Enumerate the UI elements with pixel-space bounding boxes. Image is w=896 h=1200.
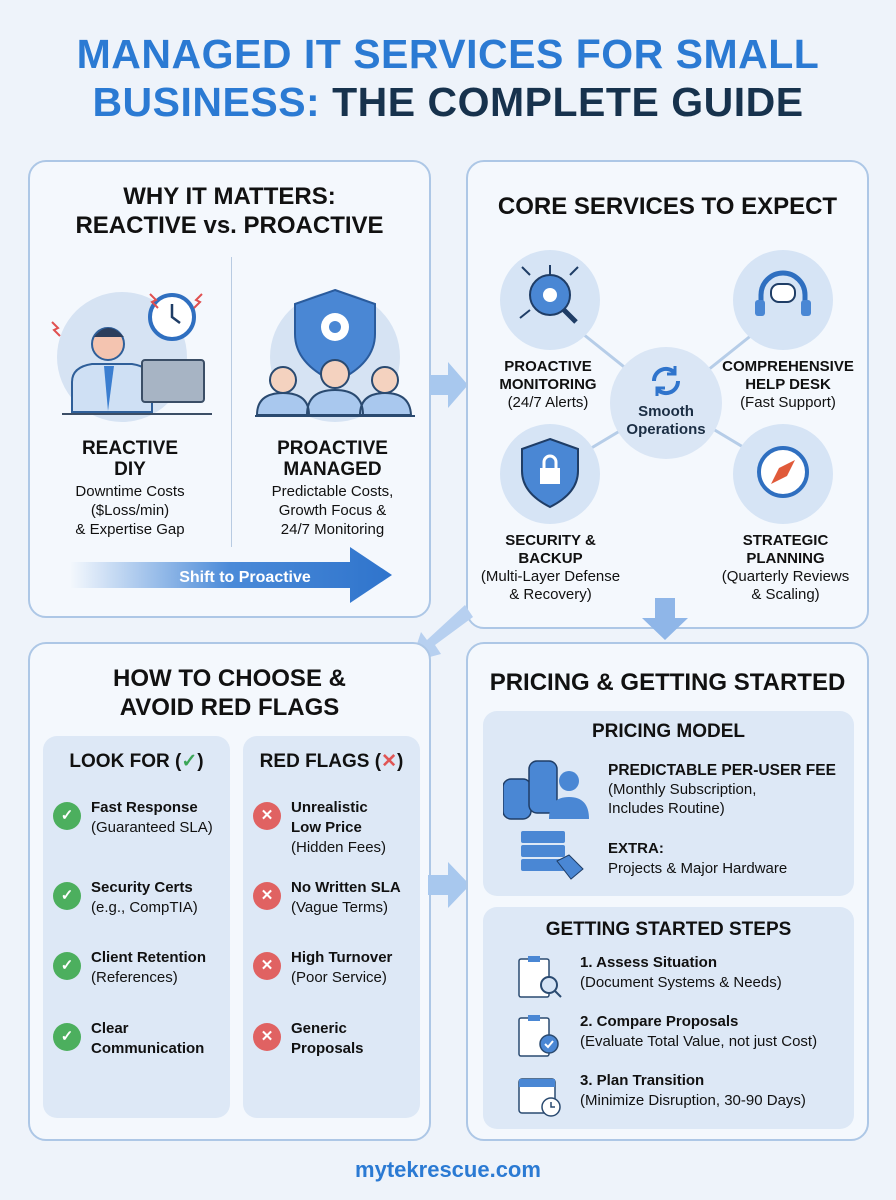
item: no written SLA: No Written SLA (291, 879, 401, 896)
text: per-user fee: (Monthly Subscription, (608, 781, 756, 798)
connector lines (584, 334, 750, 449)
heading: why it matters: REACTIVE vs. PROACTIVE (75, 212, 384, 239)
illustration: stressed reactive worker (51, 292, 212, 422)
item: generic proposals: ✕ (261, 1028, 273, 1045)
heading: how to choose: HOW TO CHOOSE & (113, 665, 346, 692)
text: reactive DIY: REACTIVE (82, 438, 178, 459)
footer: mytekrescue.com (355, 1157, 541, 1182)
item: high turnover: ✕ (261, 957, 273, 974)
text: proactive monitoring (499, 358, 597, 411)
icon: security (500, 424, 600, 524)
text: per-user fee: Includes Routine) (608, 800, 725, 817)
item: unrealistic price: Low Price (291, 819, 362, 836)
text: help desk: HELP DESK (745, 376, 831, 393)
icon: help desk (733, 250, 833, 350)
heading: how to choose: AVOID RED FLAGS (120, 694, 339, 721)
arrow: right connector (431, 362, 466, 408)
item: no written SLA: ✕ (261, 887, 273, 904)
arrow: shift to proactive: Shift to Proactive (179, 569, 311, 586)
title (77, 31, 819, 125)
text: reactive DIY (75, 438, 185, 538)
text: help desk: COMPREHENSIVE (722, 358, 854, 375)
column: red flags: RED FLAGS (✕) (260, 751, 403, 772)
item: fast response: Fast Response (91, 799, 198, 816)
text: reactive DIY: & Expertise Gap (75, 521, 185, 538)
item: security certs: Security Certs (91, 879, 193, 896)
box: getting started (483, 907, 854, 1129)
text: per-user fee (608, 762, 836, 817)
step 1: (Document Systems & Needs) (580, 974, 782, 991)
panel: how to choose (28, 642, 431, 1141)
text: proactive managed (272, 438, 393, 538)
item: fast response: (Guaranteed SLA) (91, 819, 213, 836)
heading: why it matters: WHY IT MATTERS: (123, 183, 336, 210)
divider (231, 257, 232, 547)
icon: smooth operations: Operations (626, 421, 706, 438)
item: client retention (53, 949, 206, 986)
step 3: (Minimize Disruption, 30-90 Days) (580, 1092, 806, 1109)
column: red flags (243, 736, 420, 1118)
icon: smooth operations: Smooth (638, 403, 694, 420)
text: reactive DIY: DIY (114, 459, 146, 480)
text: proactive monitoring: (24/7 Alerts) (508, 394, 588, 411)
text: security backup: & Recovery) (509, 586, 592, 603)
text: security backup: (Multi-Layer Defense (481, 568, 620, 585)
text: proactive managed: Predictable Costs, (272, 483, 393, 500)
text: reactive DIY: Downtime Costs (75, 483, 185, 500)
icon: coins and user (503, 760, 589, 820)
title: BUSINESS: THE COMPLETE GUIDE (92, 79, 804, 125)
heading: how to choose (113, 665, 346, 721)
arrow: to pricing (428, 862, 466, 908)
item: unrealistic price: Unrealistic (291, 799, 368, 816)
text: extra: Projects & Major Hardware (608, 860, 787, 877)
item: no written SLA (253, 879, 401, 916)
text: strategic planning: & Scaling) (751, 586, 820, 603)
step 3 (518, 1072, 806, 1117)
item: unrealistic price: ✕ (261, 807, 273, 824)
arrow: down connector (642, 598, 688, 640)
text: proactive monitoring: PROACTIVE (504, 358, 592, 375)
heading: core services: CORE SERVICES TO EXPECT (498, 193, 837, 220)
arrow: shift to proactive (78, 547, 392, 603)
step 2 (518, 1013, 817, 1057)
text: strategic planning: STRATEGIC (743, 532, 828, 549)
item: unrealistic price: (Hidden Fees) (291, 839, 386, 856)
title: MANAGED IT SERVICES FOR SMALL (77, 31, 819, 77)
text: strategic planning (722, 532, 849, 603)
column: look for (43, 736, 230, 1118)
item: high turnover: High Turnover (291, 949, 392, 966)
item: generic proposals: Generic (291, 1020, 347, 1037)
text: security backup: SECURITY & (505, 532, 596, 549)
box: pricing model (483, 711, 854, 896)
heading: why it matters (75, 183, 384, 239)
item: generic proposals: Proposals (291, 1040, 364, 1057)
icon: smooth operations (610, 347, 722, 459)
item: fast response (53, 799, 213, 836)
item: high turnover: (Poor Service) (291, 969, 387, 986)
item: security certs: (e.g., CompTIA) (91, 899, 198, 916)
column: look for: LOOK FOR (✓) (69, 751, 204, 772)
item: clear communication: Clear (91, 1020, 129, 1037)
text: strategic planning: (Quarterly Reviews (722, 568, 849, 585)
panel: pricing & getting started (466, 642, 869, 1141)
text: proactive monitoring: MONITORING (499, 376, 597, 393)
text: help desk (722, 358, 854, 411)
text: security backup (481, 532, 620, 603)
item: no written SLA: (Vague Terms) (291, 899, 388, 916)
text: proactive managed: MANAGED (283, 459, 382, 480)
text: proactive managed: 24/7 Monitoring (281, 521, 384, 538)
box: pricing model: PRICING MODEL (592, 721, 745, 742)
text: strategic planning: PLANNING (746, 550, 825, 567)
heading: pricing: PRICING & GETTING STARTED (490, 669, 845, 696)
box: getting started: GETTING STARTED STEPS (546, 919, 791, 940)
text: reactive DIY: ($Loss/min) (91, 502, 169, 519)
text: extra: EXTRA: (608, 840, 664, 857)
step 1: 1. Assess Situation (580, 954, 717, 971)
item: client retention: ✓ (61, 957, 73, 974)
step 1 (518, 954, 782, 998)
item: security certs (53, 879, 198, 916)
arrow: diagonal connector (418, 605, 473, 657)
panel: core services (466, 160, 869, 629)
item: clear communication (53, 1020, 204, 1057)
icon: strategic planning (733, 424, 833, 524)
text: proactive managed: PROACTIVE (277, 438, 388, 459)
item: unrealistic price (253, 799, 386, 856)
text: security backup: BACKUP (518, 550, 583, 567)
text: per-user fee: PREDICTABLE PER-USER FEE (608, 762, 836, 779)
icon: monitoring (500, 250, 600, 350)
item: clear communication: ✓ (61, 1028, 73, 1045)
illustration: proactive team with shield (255, 289, 415, 422)
step 2: 2. Compare Proposals (580, 1013, 738, 1030)
step 2: (Evaluate Total Value, not just Cost) (580, 1033, 817, 1050)
item: fast response: ✓ (61, 807, 73, 824)
step 3: 3. Plan Transition (580, 1072, 704, 1089)
item: client retention: (References) (91, 969, 178, 986)
item: security certs: ✓ (61, 887, 73, 904)
item: generic proposals (253, 1020, 364, 1057)
text: help desk: (Fast Support) (740, 394, 836, 411)
item: high turnover (253, 949, 392, 986)
panel: why it matters (28, 160, 431, 618)
item: clear communication: Communication (91, 1040, 204, 1057)
item: client retention: Client Retention (91, 949, 206, 966)
text: proactive managed: Growth Focus & (279, 502, 386, 519)
text: extra (608, 840, 787, 877)
icon: server price tag (521, 831, 584, 880)
